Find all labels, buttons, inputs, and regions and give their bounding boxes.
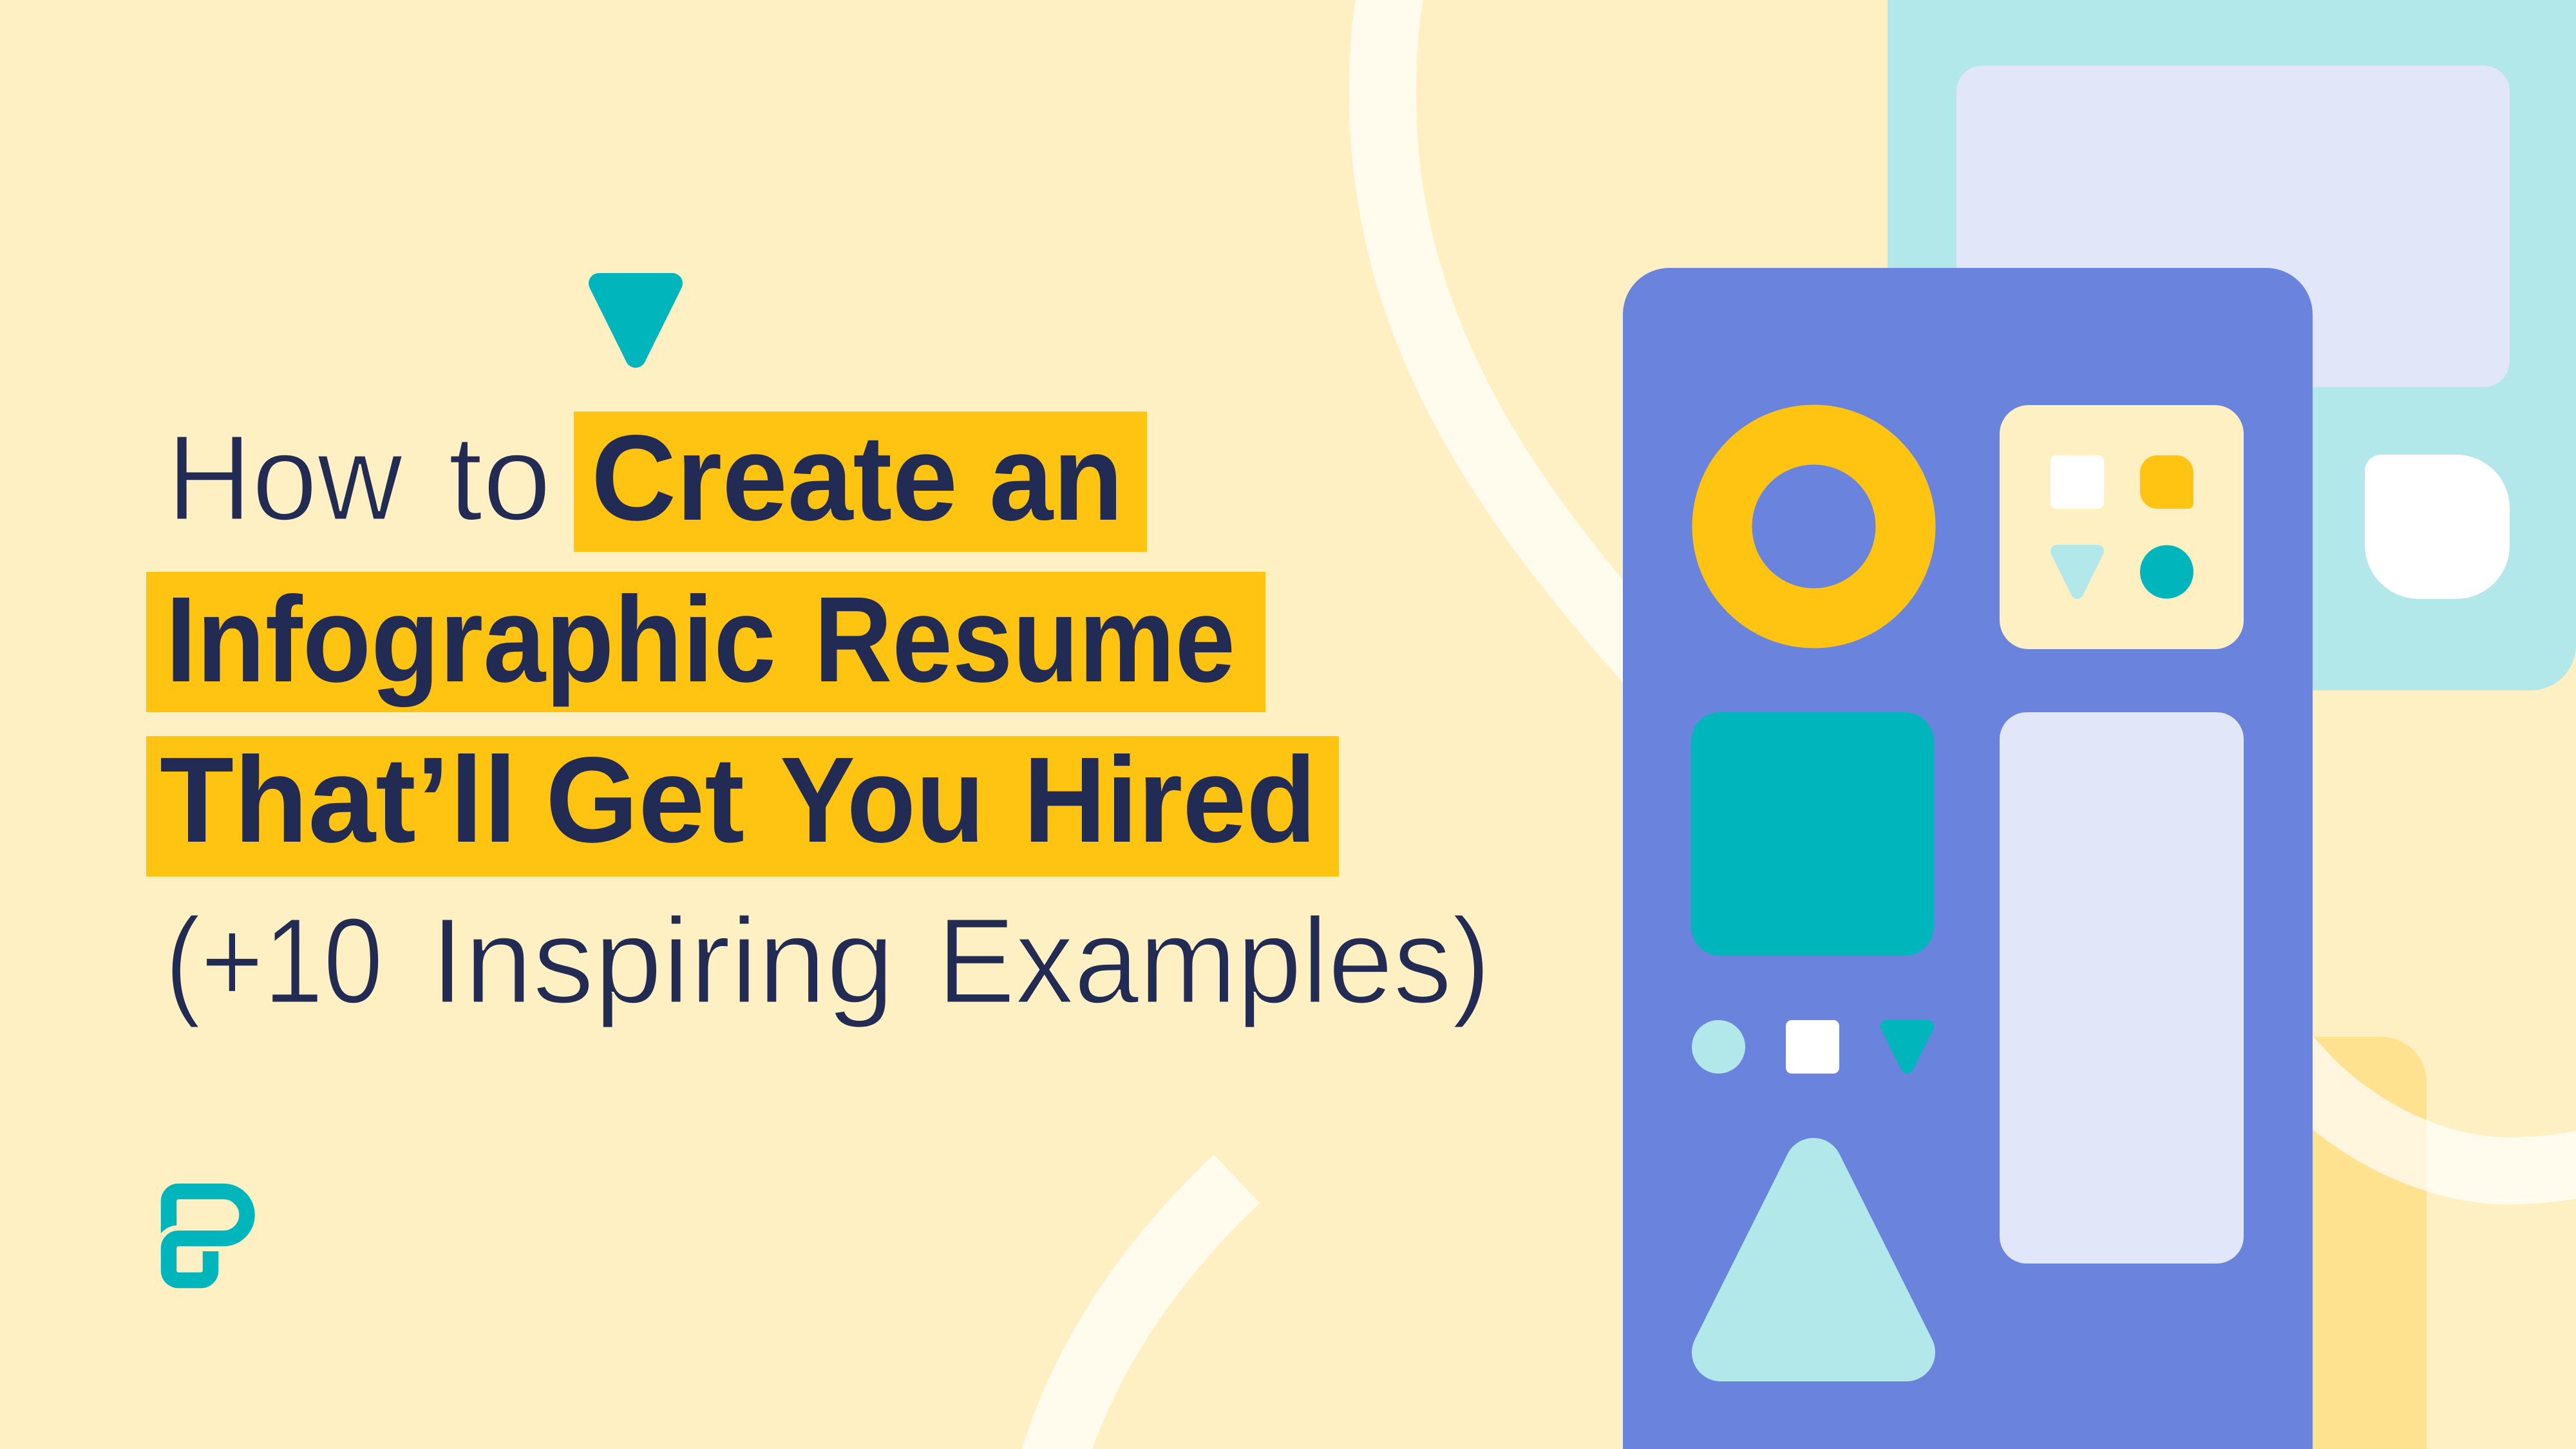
icon: teal triangle above title xyxy=(599,283,672,357)
icon: teal small triangle xyxy=(1887,1027,1927,1067)
heading text: That'll Get You Hired: You xyxy=(780,732,985,868)
highlight: line 2 xyxy=(146,572,1265,712)
heading text: That'll Get You Hired xyxy=(160,732,1316,868)
icon: teal circle xyxy=(2140,545,2193,599)
heading text: That'll Get You Hired: That’ll xyxy=(160,732,517,868)
heading text: That'll Get You Hired: Get xyxy=(545,732,744,868)
white rounded block xyxy=(2365,455,2510,599)
subtitle line: (+10 xyxy=(165,893,383,1029)
icon: white small square xyxy=(1786,1020,1839,1074)
icon: white square xyxy=(2050,455,2104,509)
decorative curve: main ribbon xyxy=(1383,0,2576,1171)
subtitle line xyxy=(165,893,1491,1029)
teal square block xyxy=(1691,712,1934,956)
sub-panel: cream icon tile xyxy=(2000,405,2244,649)
icon: large pale teal triangle xyxy=(1721,1167,1906,1352)
icon: Piktochart logo xyxy=(169,1191,247,1280)
heading text: How to xyxy=(167,410,551,546)
panel: back teal card xyxy=(1888,0,2576,690)
subtitle line: Examples) xyxy=(937,893,1491,1029)
heading text: Infographic Resume: Infographic xyxy=(166,572,776,708)
back lavender block xyxy=(1956,66,2510,387)
heading text: Infographic Resume: Resume xyxy=(814,572,1235,708)
heading text: Create an: Create xyxy=(591,410,958,546)
heading text: Create an: an xyxy=(989,410,1123,546)
title line 2 xyxy=(146,572,1265,712)
lavender tall block xyxy=(2000,712,2244,1264)
highlight: line 3 xyxy=(146,736,1339,876)
icon: pale teal circle xyxy=(1692,1020,1745,1074)
heading text: How to: How xyxy=(167,410,402,546)
title line 1 xyxy=(167,410,1147,552)
icon: pale teal triangle xyxy=(2057,551,2098,592)
heading text: That'll Get You Hired: Hired xyxy=(1023,732,1316,868)
panel: pale yellow card xyxy=(2254,1037,2427,1449)
panel: main blue card xyxy=(1623,268,2313,1449)
heading text: Infographic Resume xyxy=(166,572,1235,708)
icon: yellow ring xyxy=(1722,435,1906,618)
icon: yellow rounded square xyxy=(2140,455,2193,509)
title line 3 xyxy=(146,732,1339,876)
heading text: How to: to xyxy=(448,410,551,546)
highlight: line 1 xyxy=(574,412,1147,552)
decorative curve: lower arc xyxy=(1053,1179,1236,1449)
subtitle line: Inspiring xyxy=(430,893,895,1029)
